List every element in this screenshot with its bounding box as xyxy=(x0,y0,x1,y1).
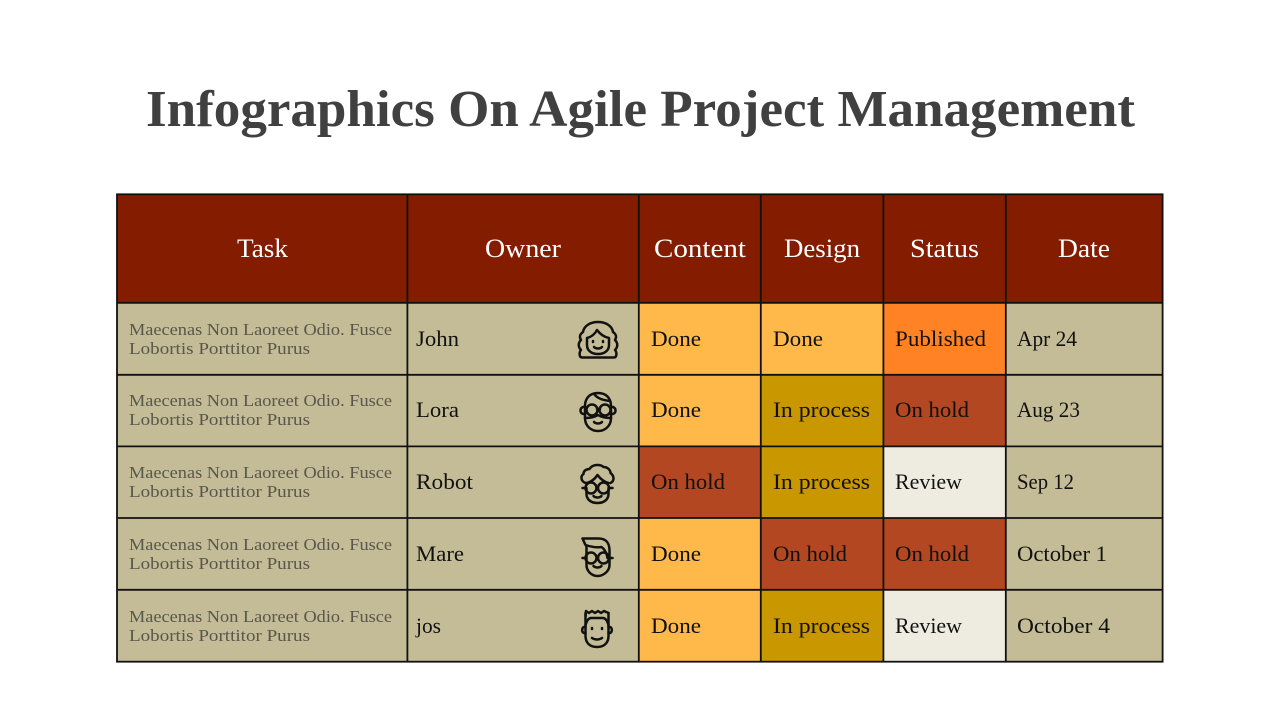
row: Mare: On hold xyxy=(895,541,969,566)
row: Lora: Lobortis Porttitor Purus xyxy=(129,410,310,429)
row: jos: jos xyxy=(415,613,441,638)
icon: woman with long hair xyxy=(579,322,617,358)
row: Mare: Mare xyxy=(416,541,464,566)
row: jos: In process xyxy=(773,613,870,638)
row: John: Apr 24 xyxy=(1017,326,1077,351)
header row: Design xyxy=(784,234,860,263)
row: Robot: Robot xyxy=(416,469,473,494)
icon: curly-haired person with glasses xyxy=(581,465,614,503)
row: Mare: October 1 xyxy=(1017,541,1107,566)
row: jos: Lobortis Porttitor Purus xyxy=(129,626,310,645)
table xyxy=(117,194,1163,662)
icon: man with spiky hair xyxy=(582,611,612,647)
row: Lora: Maecenas Non Laoreet Odio. Fusce xyxy=(129,391,392,410)
row: Mare: On hold xyxy=(773,541,847,566)
row: Lora xyxy=(117,375,1163,447)
row: John: Maecenas Non Laoreet Odio. Fusce xyxy=(129,320,392,339)
header row: Content xyxy=(654,234,747,263)
icon: man with swept hair and glasses xyxy=(582,538,612,576)
row: Robot: In process xyxy=(773,469,870,494)
row: Robot: Lobortis Porttitor Purus xyxy=(129,482,310,501)
header row: Date xyxy=(1058,234,1110,263)
row: Robot: Maecenas Non Laoreet Odio. Fusce xyxy=(129,463,392,482)
row: Lora: On hold xyxy=(895,397,969,422)
row: Lora: Aug 23 xyxy=(1017,397,1080,422)
row: Lora: Lora xyxy=(416,397,459,422)
row: John: John xyxy=(416,326,459,351)
row: John: Published xyxy=(895,326,986,351)
row: Robot xyxy=(117,447,1163,518)
row: John: Lobortis Porttitor Purus xyxy=(129,339,310,358)
row: Robot: Review xyxy=(895,469,962,494)
row: Mare: Maecenas Non Laoreet Odio. Fusce xyxy=(129,535,392,554)
row: jos xyxy=(117,590,1163,662)
row: Mare: Lobortis Porttitor Purus xyxy=(129,554,310,573)
row: Mare xyxy=(117,518,1163,590)
row: jos: Done xyxy=(651,613,701,638)
row: Robot: Sep 12 xyxy=(1017,469,1074,494)
title: Infographics On Agile Project Management xyxy=(146,81,1136,138)
row: Lora: In process xyxy=(773,397,870,422)
row: Lora: Done xyxy=(651,397,701,422)
row: jos: Maecenas Non Laoreet Odio. Fusce xyxy=(129,607,392,626)
icon: bald man with glasses and moustache xyxy=(580,393,616,431)
row: Mare: Done xyxy=(651,541,701,566)
header row: Status xyxy=(910,234,979,263)
row: John xyxy=(117,303,1163,375)
header row: Owner xyxy=(485,234,561,263)
header row xyxy=(117,194,1163,303)
row: jos: Review xyxy=(895,613,962,638)
header row: Task xyxy=(237,234,288,263)
row: John: Done xyxy=(773,326,823,351)
row: jos: October 4 xyxy=(1017,613,1110,638)
row: John: Done xyxy=(651,326,701,351)
row: Robot: On hold xyxy=(651,469,725,494)
